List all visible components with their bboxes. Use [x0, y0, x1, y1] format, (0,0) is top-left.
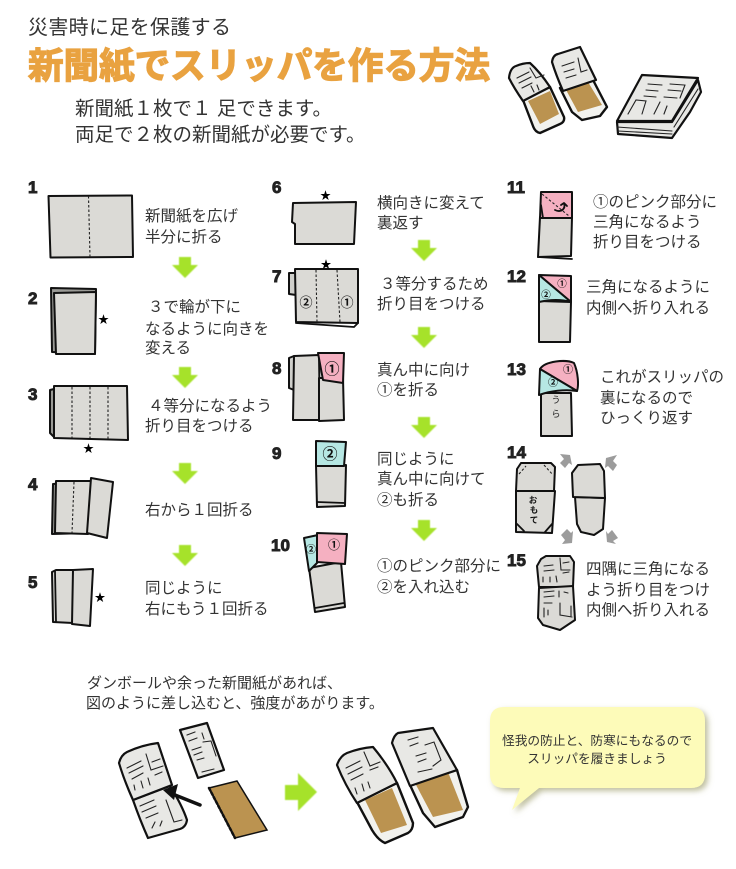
step 12 [507, 267, 710, 342]
step 5 [28, 569, 269, 626]
step 12: 内側へ折り入れる [586, 299, 710, 317]
step 13: う [551, 395, 561, 405]
step 3 [28, 385, 272, 455]
step 3: ★ [83, 443, 94, 455]
step 7: ② [299, 295, 313, 310]
step 9: ② [322, 446, 338, 463]
step 1: 新聞紙を広げ [145, 207, 239, 225]
step 15 [507, 551, 710, 630]
arrow to finished slippers [285, 773, 317, 811]
step 15: 内側へ折り入れる [586, 601, 710, 619]
step 12: ① [557, 279, 567, 290]
step 10: ① [328, 538, 340, 552]
step 10: ② [306, 544, 316, 556]
reinforcement note [86, 675, 384, 712]
step 14: て [530, 515, 538, 525]
subtitle: 災害時に足を保護する [28, 16, 231, 39]
step 14: お [529, 495, 538, 505]
step 2: 変える [145, 339, 191, 357]
arrow 7 to 8 [411, 327, 437, 348]
step 6: 6 [272, 178, 281, 197]
step 5: 同じように [145, 580, 223, 597]
step 2: ３で輪が下に [148, 298, 241, 316]
step 7: ★ [320, 259, 332, 271]
step 7 [272, 259, 489, 327]
step 8 [272, 353, 470, 421]
speech bubble callout: 怪我の防止と、防寒にもなるので [502, 733, 692, 748]
step 5: ★ [94, 592, 106, 604]
step 6: 裏返す [377, 214, 424, 232]
step 5: 5 [28, 573, 37, 592]
step 13: ② [548, 377, 558, 389]
step 15: 四隅に三角になる [586, 560, 710, 578]
step 8: ①を折る [377, 381, 439, 399]
reinforcement note: ダンボールや余った新聞紙があれば、 [87, 675, 342, 692]
step 8: ① [324, 361, 340, 378]
step 8: 真ん中に向け [377, 361, 470, 379]
arrow 6 to 7 [411, 240, 437, 261]
step 2: 2 [28, 289, 37, 308]
step 12: ② [541, 290, 551, 301]
step 8: 8 [272, 359, 281, 378]
step 11: 三角になるよう [593, 213, 702, 231]
speech bubble callout: スリッパを履きましょう [527, 752, 667, 766]
step 10: ①のピンク部分に [377, 557, 501, 575]
step 13: ひっくり返す [600, 409, 693, 427]
step 3: 折り目をつける [145, 417, 254, 435]
step 13: ① [563, 364, 573, 376]
step 9: 9 [272, 444, 281, 463]
step 10: 10 [271, 536, 290, 555]
step 7: 7 [272, 267, 281, 286]
step 4: 4 [28, 475, 38, 494]
step 2 [28, 288, 269, 357]
step 1: 1 [28, 178, 37, 197]
step 11: 折り目をつける [593, 233, 702, 251]
step 9: 同じように [377, 451, 455, 468]
arrow 4 to 5 [172, 545, 198, 566]
step 11: ①のピンク部分に [593, 193, 717, 211]
step 14: 14 [507, 443, 526, 462]
step 13 [507, 360, 724, 436]
step 6: ★ [320, 190, 331, 202]
step 3: 3 [28, 385, 37, 404]
step 4: 右から１回折る [145, 501, 254, 519]
step 7: ① [340, 295, 354, 310]
arrow 2 to 3 [172, 367, 198, 388]
step 13: ら [551, 409, 561, 419]
arrow 9 to 10 [411, 520, 437, 541]
step 14: も [530, 505, 538, 515]
illustration: finished slippers and newspaper stack [509, 47, 701, 138]
arrow 1 to 2 [172, 257, 198, 278]
step 10: ②を入れ込む [377, 578, 470, 596]
step 10 [271, 533, 501, 612]
step 9: 真ん中に向けて [377, 470, 486, 488]
arrow 8 to 9 [411, 417, 437, 438]
step 13: 13 [507, 360, 526, 379]
intro text [75, 98, 366, 146]
step 15: よう折り目をつけ [586, 581, 710, 599]
step 7: 折り目をつける [377, 295, 486, 313]
step 6 [272, 178, 485, 244]
step 4 [28, 475, 254, 538]
step 11 [507, 178, 717, 259]
intro text: 新聞紙１枚で１ 足できます。 [75, 98, 332, 120]
arrow 3 to 4 [172, 463, 198, 484]
speech bubble callout [490, 707, 705, 810]
reinforcement note: 図のように差し込むと、強度があがります。 [86, 695, 384, 712]
step 12: 12 [507, 267, 526, 286]
step 2: ★ [98, 314, 109, 326]
step 6: 横向きに変えて [377, 194, 485, 212]
step 12: 三角になるように [586, 278, 710, 296]
step 1: 半分に折る [145, 228, 223, 246]
step 2: なるように向きを [145, 320, 269, 338]
step 15: 15 [507, 551, 526, 570]
illustration: inserting cardboard [119, 723, 267, 838]
step 14 [507, 443, 618, 544]
title: 新聞紙でスリッパを作る方法 [28, 45, 490, 86]
step 9 [272, 441, 486, 509]
step 9: ②も折る [377, 491, 439, 509]
step 1 [28, 178, 239, 258]
step 3: ４等分になるよう [148, 397, 272, 415]
illustration: finished reinforced slippers [337, 728, 468, 843]
intro text: 両足で２枚の新聞紙が必要です。 [75, 124, 366, 146]
step 7: ３等分するため [380, 275, 489, 293]
step 5: 右にもう１回折る [145, 600, 269, 618]
step 13: 裏になるので [600, 389, 693, 407]
step 11: 11 [507, 178, 525, 197]
step 13: これがスリッパの [600, 368, 724, 386]
